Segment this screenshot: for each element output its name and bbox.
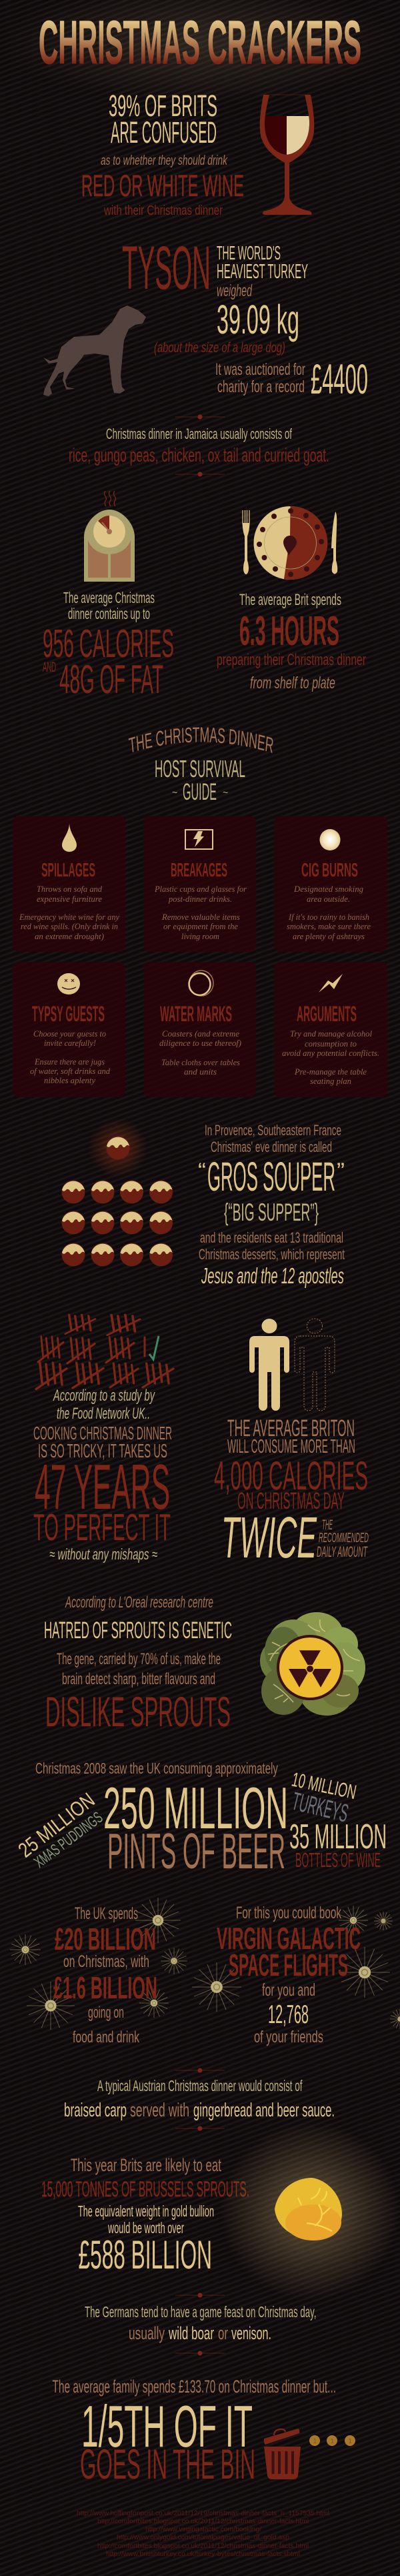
heading: host survival guide: ~	[172, 787, 177, 798]
text block: arguments tips: consumption to	[305, 1039, 357, 1049]
panel: typsy guests	[13, 962, 125, 1097]
text: intro: Christmas 2008 saw the UK consuming approximately	[35, 1760, 278, 1777]
text block: austrian dinner	[64, 2077, 335, 2121]
text block: brits confused: 39% OF BRITS	[109, 89, 217, 123]
background glow behind title	[0, 0, 400, 103]
text block: goes in the bin	[52, 2377, 336, 2488]
text: 47 YEARS	[35, 1451, 170, 1523]
text block: brussels sprouts: The equivalent weight in gold bullion	[78, 2202, 214, 2220]
text block: gros souper: “	[198, 1159, 206, 1183]
text block: world's heaviest turkey: charity for a record	[217, 378, 305, 396]
text block: world's heaviest turkey: (about the size of a large dog)	[154, 340, 285, 356]
text block: calories: dinner contains up to	[68, 605, 150, 622]
text block: brussels sprouts: £588 BILLION	[79, 2232, 212, 2277]
text block: 47 years: ≈ without any mishaps ≈	[49, 1545, 157, 1563]
text block: brits confused	[81, 89, 244, 218]
text block: austrian dinner: braised carp	[64, 2100, 127, 2121]
text block: UK spends: £20 BILLION	[55, 1922, 156, 1956]
text block: typsy tips: of water, soft drinks and	[30, 1067, 111, 1076]
divider	[175, 2126, 225, 2130]
heading: host survival guide: THE CHRISTMAS DINNER	[128, 727, 273, 753]
text block: calories: 48G OF FAT	[59, 657, 163, 702]
text block: sources: http://www.huffingtonpost.co.uk/2011/12/19/christmas-dinner-facts_n_1157535.html	[77, 2509, 329, 2517]
text block: calories: The average Christmas	[63, 589, 155, 606]
text block: sprouts genetic: According to L'Oreal research centre	[65, 1593, 213, 1612]
heading: host survival guide	[128, 727, 273, 805]
text block: sources: http://comfortbites.blogspot.co.uk/2011/12/christmas-dinner-facts.html	[97, 2542, 309, 2550]
text block: water marks tips: Coasters (and extreme	[162, 1029, 239, 1039]
text block: breakages tips: Remove valuable items	[161, 912, 240, 922]
text block: UK spends: going on	[88, 2004, 124, 2022]
text block: breakages tips: post-dinner drinks.	[168, 894, 232, 904]
text block: goes in the bin: 1/5TH OF IT	[81, 2393, 253, 2459]
heading: host survival guide: HOST SURVIVAL	[155, 755, 245, 782]
icon: plate with cutlery	[243, 506, 337, 580]
text block: typsy tips: Ensure there are jugs	[34, 1057, 105, 1067]
panel: cig burns	[274, 816, 387, 952]
text block: arguments tips: seating plan	[310, 1077, 351, 1086]
divider	[175, 472, 225, 476]
text: TO PERFECT IT	[33, 1506, 171, 1549]
text block: brits confused: with their Christmas dinner	[103, 203, 223, 218]
text block: space flights: of your friends	[254, 2028, 323, 2046]
text block: world's heaviest turkey	[154, 243, 368, 403]
text block: spillages tips	[19, 884, 119, 941]
icon: water rings	[189, 971, 213, 996]
text block: brussels sprouts: would be worth over	[107, 2219, 184, 2236]
text block: sprouts genetic: The gene, carried by 70% of us, make the	[57, 1650, 221, 1668]
icon: broken frame	[185, 830, 213, 849]
icon: three coins: 1	[331, 2438, 335, 2445]
icon: bin	[264, 2429, 301, 2479]
text block: water marks tips: and units	[184, 1067, 217, 1077]
panel: breakages: BREAKAGES	[171, 860, 227, 881]
text block: hours: from shelf to plate	[250, 674, 335, 692]
text block: space flights: for you and	[262, 1980, 315, 2000]
text block: UK spends	[53, 1904, 157, 2046]
icon: solid person	[249, 1319, 289, 1411]
text block: space flights	[217, 1904, 361, 2046]
panel: tyson turkey: TYSON	[122, 234, 211, 302]
text block: average briton: THE	[322, 1517, 333, 1533]
stat: bottles of wine	[289, 1818, 387, 1872]
stat: turkeys	[289, 1769, 358, 1828]
icon: three coins: 1	[313, 2438, 317, 2445]
text block: german feast: usually	[129, 2323, 165, 2343]
text block: cig burns tips: smokers, make sure there	[287, 922, 371, 931]
icon: wine glass	[260, 95, 314, 215]
text block: austrian dinner: served with	[130, 2100, 189, 2121]
text block: water marks tips	[159, 1029, 241, 1077]
text block: 47 years: According to a study by	[53, 1387, 155, 1405]
panel: breakages	[143, 816, 256, 952]
text block: arguments tips	[282, 1029, 379, 1086]
text block: cig burns tips	[287, 884, 371, 941]
icon: steam	[104, 491, 116, 506]
panel: water marks: WATER MARKS	[160, 1002, 232, 1026]
icon: weighing scale	[84, 510, 135, 582]
text block: arguments tips: avoid any potential conflicts.	[282, 1049, 379, 1058]
text block: german feast: wild boar	[168, 2323, 214, 2343]
text block: cig burns tips: If it's too rainy to banish	[288, 912, 369, 922]
text block: space flights: 12,768	[268, 2000, 309, 2029]
text block: UK spends: food and drink	[73, 2028, 140, 2046]
icon: drop	[62, 824, 77, 852]
text block: world's heaviest turkey: weighed	[217, 281, 253, 300]
text block: sources: http://www.onlygold.com/tutorialpages/value_of_gold.asp	[117, 2533, 289, 2541]
icon: dog silhouette	[43, 305, 146, 396]
text block: breakages tips: Plastic cups and glasses for	[154, 884, 247, 894]
text block: german feast: venison.	[231, 2323, 271, 2343]
text block: world's heaviest turkey: 39.09 kg	[217, 297, 299, 342]
icon: radioactive sprout	[260, 1612, 365, 1716]
text block: 47 years: IS SO TRICKY, IT TAKES US	[38, 1441, 167, 1462]
text block: cig burns tips: Designated smoking	[293, 884, 363, 894]
text block: arguments tips: Try and manage alcohol	[290, 1029, 373, 1039]
text block: breakages tips	[154, 884, 247, 941]
text block: brussels sprouts: This year Brits are likely to eat	[71, 2155, 221, 2175]
panel: water marks	[143, 962, 256, 1097]
heading: host survival guide: GUIDE	[183, 779, 217, 805]
icon: three coins	[309, 2435, 355, 2446]
text block: typsy tips	[30, 1029, 111, 1085]
text block: world's heaviest turkey: THE WORLD'S	[217, 243, 281, 264]
icon: golden sprout	[220, 2121, 400, 2301]
panel: red or white wine	[81, 89, 314, 218]
divider	[175, 2293, 225, 2297]
text block: average briton	[214, 1415, 369, 1570]
text block: gros souper	[198, 1122, 345, 1288]
text block: brussels sprouts	[41, 2155, 249, 2277]
text block: typsy tips: Choose your guests to	[33, 1029, 106, 1039]
text block: sources	[77, 2509, 329, 2558]
text: COOKING CHRISTMAS DINNER	[33, 1423, 172, 1443]
text block: breakages tips: living room	[181, 932, 219, 941]
text block: sources: http://www.britishturkey.co.uk/turkey-bytes/christmas-facts.shtml	[106, 2550, 300, 2558]
text block: sources: http://www.virgingalactic.com/booking/	[145, 2525, 261, 2533]
panel: typsy guests: TYPSY GUESTS	[32, 1002, 105, 1026]
text block: gros souper: ”	[337, 1159, 345, 1183]
text block: breakages tips: or equipment from the	[163, 922, 238, 931]
text block: 47 years: the Food Network UK..	[57, 1405, 150, 1423]
text block: cig burns tips: are plenty of ashtrays	[293, 932, 365, 941]
panel: UK consumption	[14, 1760, 387, 1879]
icon: lightning	[319, 974, 343, 993]
icon group: thirteen christmas puddings	[61, 1118, 173, 1266]
text block: hours	[217, 591, 366, 692]
stat: xmas puddings: XMAS PUDDINGS	[31, 1808, 106, 1872]
stat: pints of beer	[103, 1775, 288, 1879]
text block: brits confused: as to whether they should drink	[101, 153, 228, 168]
text block: spillages tips: red wine spills. (Only drink in	[21, 922, 118, 931]
text block: world's heaviest turkey: It was auctioned for	[215, 360, 305, 379]
divider	[175, 2068, 225, 2073]
text block: calories	[43, 589, 174, 702]
text block: german feast: or	[218, 2323, 228, 2343]
text block: brits confused: RED OR WHITE WINE	[81, 169, 244, 203]
panel: spillages	[13, 816, 125, 952]
icon: dashed person	[295, 1319, 335, 1411]
text block: water marks tips: Table cloths over tables	[161, 1058, 240, 1067]
text block: jamaica dinner	[69, 426, 329, 466]
text block: spillages tips: an extreme drought)	[35, 932, 104, 941]
icon: green tick	[149, 1336, 159, 1359]
text block: spillages tips: expensive furniture	[37, 894, 102, 904]
icon: glowing ember	[320, 829, 340, 850]
text: 956 CALORIES	[43, 622, 174, 666]
text block: typsy tips: nibbles aplenty	[44, 1076, 95, 1085]
divider	[175, 415, 225, 419]
text block: cig burns tips: area outside.	[307, 894, 350, 904]
stat: turkeys: 10 MILLION	[290, 1769, 358, 1804]
text block: spillages tips: Emergency white wine for any	[19, 912, 119, 922]
decorative fireworks	[10, 1898, 400, 2030]
text block: typsy tips: invite carefully!	[44, 1039, 96, 1048]
stat: xmas puddings	[14, 1788, 106, 1872]
text block: german feast	[85, 2303, 316, 2343]
text block: 47 years	[33, 1387, 172, 1563]
icon: three coins: 1	[348, 2438, 352, 2445]
text block: spillages tips: Throws on sofa and	[37, 884, 103, 894]
text block: brits confused: ARE CONFUSED	[111, 115, 217, 149]
text block: sprouts genetic: brain detect sharp, bitter flavours and	[62, 1670, 215, 1688]
stat: xmas puddings: 25 MILLION	[14, 1788, 99, 1862]
text block: UK spends: on Christmas, with	[63, 1952, 149, 1971]
panel: tyson turkey	[43, 234, 368, 403]
text block: arguments tips: Pre-manage the table	[294, 1067, 367, 1077]
panel: arguments	[274, 962, 387, 1097]
text block: water marks tips: diligence to use thereof)	[159, 1039, 241, 1048]
panel: spillages: SPILLAGES	[41, 860, 95, 881]
icon: tipsy face	[57, 973, 80, 995]
divider	[175, 2351, 225, 2356]
heading: host survival guide: ~	[223, 787, 228, 798]
text block: sources: http://comfortbites.blogspot.co.uk/2011/12/christmas-dinner-facts.html	[97, 2517, 309, 2525]
text block: sprouts genetic	[44, 1593, 232, 1736]
text block: UK spends: £1.6 BILLION	[53, 1970, 157, 2005]
text block: UK spends: The UK spends	[75, 1904, 138, 1923]
icon: tally marks	[36, 1315, 173, 1389]
text block: calories: AND	[43, 660, 56, 675]
